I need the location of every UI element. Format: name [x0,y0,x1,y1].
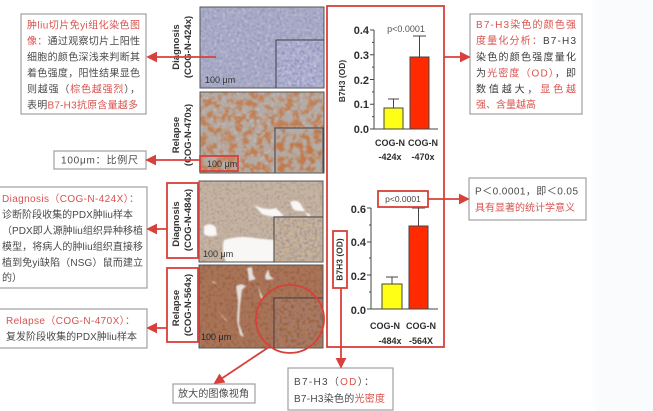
bar chart: COG-N-484x vs COG-N-564x: -564X [409,336,433,346]
text box: OD quantification: 染色的颜色强度量化 [476,50,576,64]
bar chart: COG-N-484x vs COG-N-564x: 0.4 [351,237,367,249]
bar chart: COG-N-424x vs COG-N-470x: COG-N [408,138,438,148]
red frame: OD bar charts [327,6,444,347]
text box: Diagnosis COG-N-424X: Diagnosis（COG-N-424X）： [2,193,139,205]
sample label: Diagnosis COG-N-484x [167,183,198,258]
text box: immunohistochemistry explanation: 则越强（棕色越强烈）， [27,82,140,96]
text box: B7-H3 OD: B7-H3染色的光密度 [294,392,385,405]
text box: Diagnosis COG-N-424X: （PDX即人源肿liu组织异种移植 [2,224,143,237]
sample label: Diagnosis COG-N-424x: Diagnosis [171,24,182,70]
text box: scale bar: 100μm：比例尺 [61,154,138,166]
bar chart: COG-N-484x vs COG-N-564x: 0.6 [351,204,366,216]
text box: immunohistochemistry explanation: 肿liu切片免yi组化染色图 [27,18,140,32]
sample label: Diagnosis COG-N-484x: Diagnosis [171,201,182,247]
arrow: Diagnosis label to box [148,228,167,230]
sample label: Relapse COG-N-470x [171,104,194,166]
bar chart: COG-N-424x vs COG-N-470x: B7H3 (OD) [337,60,347,102]
text box: immunohistochemistry explanation: 像：通过观察切片上阳性 [27,34,140,48]
bar chart: COG-N-424x vs COG-N-470x: 0.3 [354,50,369,62]
bar chart: COG-N-424x vs COG-N-470x: -424x [378,152,402,162]
arrow: panel to IHC explanation [148,56,216,58]
p-value highlight [378,191,428,207]
text box: immunohistochemistry explanation [21,14,146,114]
bar chart: COG-N-424x vs COG-N-470x: 0.1 [354,99,369,111]
arrow: p-value to meaning box [428,198,468,200]
text box: magnified view [173,384,255,403]
text box: Relapse COG-N-470X: 复发阶段收集的PDX肿liu样本 [6,330,137,343]
scale bar label: 100 μm [205,75,235,85]
sample label: Relapse COG-N-470x: (COG-N-470x) [183,104,194,166]
bar chart: COG-N-424x vs COG-N-470x: 0.0 [354,124,369,136]
text box: B7-H3 OD [288,368,393,410]
arrow: circle to magnified view box [215,347,269,383]
panel: micrograph Diagnosis COG-N-484x [199,181,323,262]
axis label highlight: B7H3 (OD) [333,231,347,288]
bar chart: COG-N-424x vs COG-N-470x: p<0.0001 [387,24,425,34]
sample label: Relapse COG-N-564x: (COG-N-564x) [183,274,194,336]
bar chart: COG-N-484x vs COG-N-564x [333,191,438,346]
scale bar label: 100 μm [203,249,233,259]
sample label: Diagnosis COG-N-424x: (COG-N-424x) [183,16,194,78]
text box: OD quantification: 度量化分析：B7-H3 [476,34,576,47]
p-value highlight: p<0.0001 [385,194,421,204]
text box: Diagnosis COG-N-424X: 的） [2,271,22,284]
text box: magnified view: 放大的图像视角 [178,387,249,400]
text box: Diagnosis COG-N-424X: 诊断阶段收集的PDX肿liu样本 [2,208,133,221]
bar chart: COG-N-484x vs COG-N-564x: 0.0 [351,305,366,317]
panel: micrograph Relapse COG-N-564x [199,265,323,348]
text box: Diagnosis COG-N-424X: 模型，将病人的肿liu组织直接移 [2,240,143,253]
bar chart: COG-N-484x vs COG-N-564x: COG-N [406,321,436,331]
bar chart: COG-N-484x vs COG-N-564x: 0.2 [351,271,366,283]
bar chart: COG-N-424x vs COG-N-470x: -470x [411,152,435,162]
bar chart: COG-N-424x vs COG-N-470x: 0.4 [354,25,370,37]
bar chart: COG-N-484x vs COG-N-564x: -484x [378,336,402,346]
bar chart: COG-N-484x vs COG-N-564x: COG-N [370,321,400,331]
text box: OD quantification: 为光密度（OD），即 [476,66,576,80]
text box: Diagnosis COG-N-424X [0,187,147,288]
scale bar label: 100 μm [207,159,237,169]
text box: B7-H3 OD: B7-H3（OD）： [294,376,374,388]
text box: OD quantification: 数值越大， 显色越 [476,82,576,96]
text box: Relapse COG-N-470X [0,309,147,348]
text box: immunohistochemistry explanation: 着色强度，阳性结果显色 [27,66,140,80]
text box: Relapse COG-N-470X: Relapse（COG-N-470X）： [6,315,135,327]
arrow: scale bar to box [147,159,200,161]
panel: micrograph Diagnosis COG-N-424x [200,7,324,88]
text box: Diagnosis COG-N-424X: 植到免yi缺陷（NSG）鼠而建立 [2,256,143,269]
text box: OD quantification: 强、含量越高 [476,98,536,111]
text box: OD quantification: B7-H3染色的颜色强 [476,18,576,31]
bar chart: COG-N-424x vs COG-N-470x: COG-N [375,138,405,148]
text box: immunohistochemistry explanation: 细胞的颜色深浅来判断其 [27,50,140,64]
bar chart: COG-N-424x vs COG-N-470x: 0.2 [354,75,369,87]
panel: micrograph Relapse COG-N-470x [200,92,324,173]
scale bar label: 100 μm [201,332,231,342]
text box: p-value meaning: 具有显著的统计学意义 [475,201,575,214]
sample label: Relapse COG-N-564x: Relapse [171,290,182,326]
text box: OD quantification [470,14,582,114]
sample label: Relapse COG-N-564x [167,268,198,342]
sample label: Diagnosis COG-N-484x: (COG-N-484x) [183,189,194,251]
text box: scale bar [54,151,146,169]
highlight: magnified view circle [256,285,324,353]
text box: p-value meaning [469,178,586,220]
sample label: Diagnosis COG-N-424x [171,16,194,78]
text box: p-value meaning: P＜0.0001，即＜0.05 [475,186,578,198]
sample label: Relapse COG-N-470x: Relapse [171,117,182,153]
axis label highlight: B7H3 (OD): B7H3 (OD) [334,238,344,281]
highlight: scale bar box [200,156,238,171]
arrow: axis label to OD box [340,288,342,367]
text box: immunohistochemistry explanation: 表明B7-H3抗原含量越多 [27,98,138,112]
arrow: Relapse label to box [148,327,167,329]
arrow: chart frame to OD quantification [444,56,469,58]
bar chart: COG-N-424x vs COG-N-470x [337,24,438,162]
